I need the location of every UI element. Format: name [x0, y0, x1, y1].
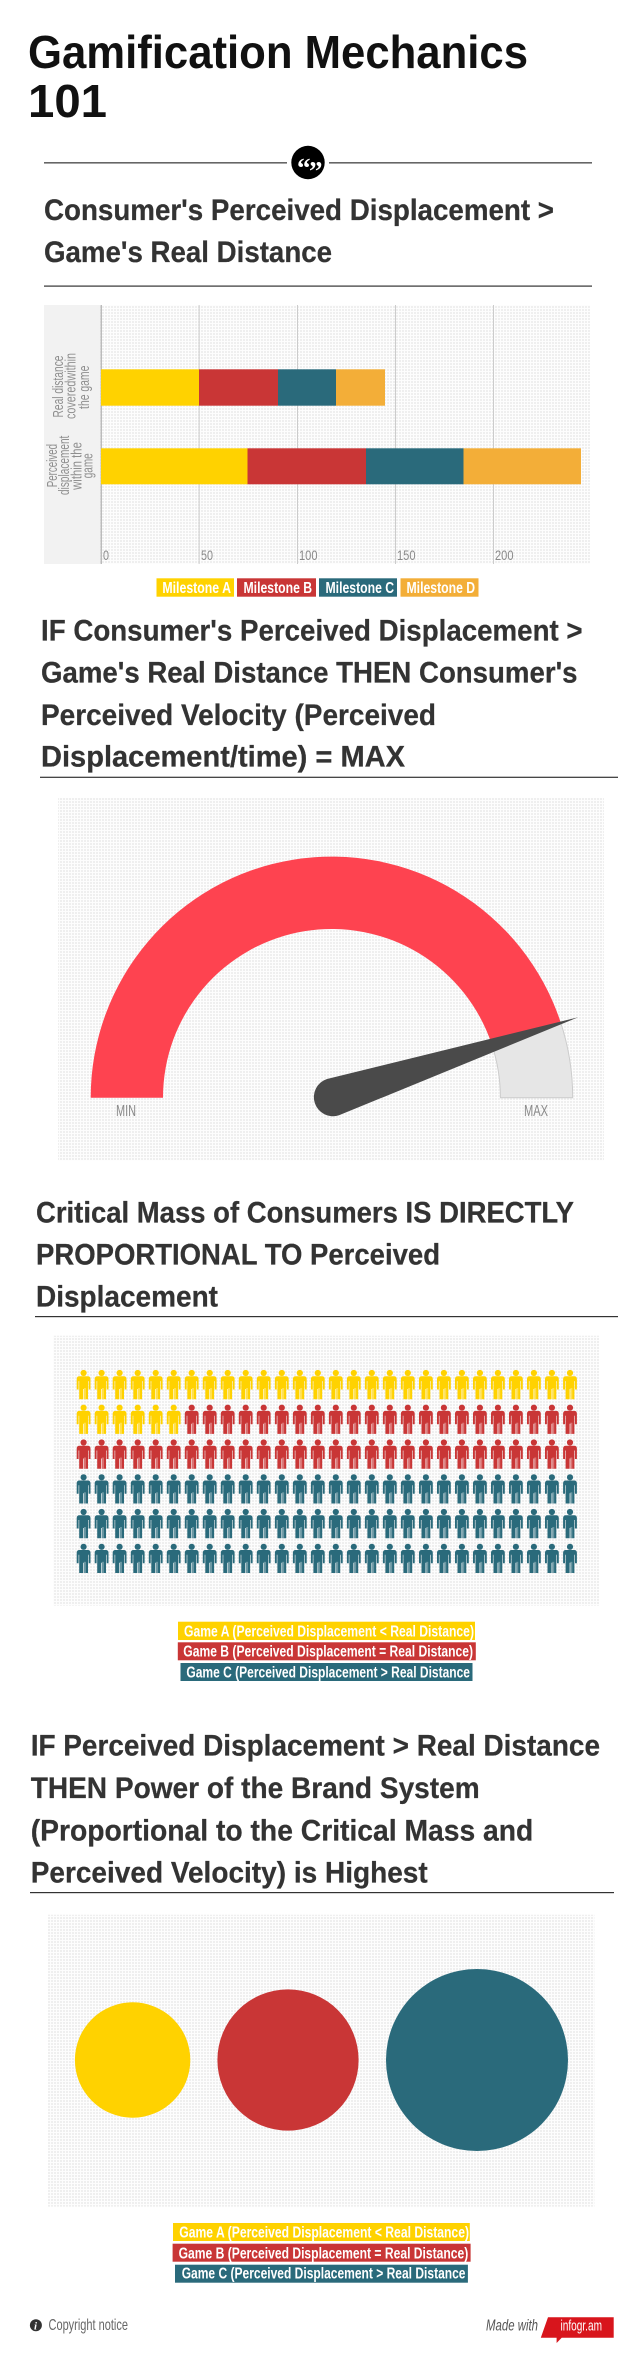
footer: copyright notice: i — [34, 2320, 38, 2332]
bubble: game A — [75, 2002, 190, 2118]
panel: stacked bar chart — [44, 305, 590, 564]
gauge value arc — [91, 857, 560, 1098]
heading: perceived velocity: IF Consumer's Perceived Displacement > — [41, 615, 583, 648]
title — [28, 26, 528, 127]
category label: perceived displacement: Perceived — [44, 444, 61, 487]
heading: perceived displacement — [44, 194, 554, 269]
heading: perceived displacement: Game's Real Distance — [44, 236, 332, 269]
axis labels: 0 — [103, 547, 109, 563]
gauge remainder — [492, 1022, 573, 1098]
axis labels: 50 — [201, 547, 213, 563]
bubble: game B — [217, 1989, 359, 2131]
row 3: game B — [77, 1439, 577, 1469]
legend: games (bubbles): Game B (Perceived Displacement = Real Distance) — [179, 2245, 468, 2262]
heading: perceived displacement: Consumer's Perceived Displacement > — [44, 194, 554, 227]
legend: games (bubbles): Game C (Perceived Displacement > Real Distance — [182, 2265, 466, 2282]
bubble: game C — [386, 1969, 568, 2151]
legend: games (pictogram): Game B (Perceived Displacement = Real Distance) — [183, 1644, 473, 1661]
row 2: game A and game B — [77, 1405, 577, 1434]
gauge min label: MIN — [116, 1103, 136, 1120]
category label: real distance: coveredwithin — [63, 353, 80, 419]
heading: critical mass — [36, 1196, 574, 1314]
legend: games (pictogram): Game C (Perceived Displacement > Real Distance — [186, 1665, 470, 1682]
heading: power of the brand: Perceived Velocity) is Highest — [31, 1856, 428, 1889]
category label: perceived displacement: within the — [69, 442, 86, 491]
category label: real distance — [50, 353, 93, 419]
heading: perceived velocity: Displacement/time) = MAX — [41, 741, 405, 774]
gauge needle — [314, 1017, 578, 1116]
footer: copyright notice: Copyright notice — [48, 2317, 128, 2334]
heading: perceived velocity: Perceived Velocity (Perceived — [41, 699, 436, 732]
legend: games (pictogram) — [178, 1622, 476, 1682]
panel: people pictogram — [53, 1336, 599, 1606]
category label: real distance: Real distance — [50, 356, 67, 418]
legend: games (bubbles) — [173, 2223, 471, 2283]
icon: quotation marks — [291, 146, 325, 186]
legend: milestones: Milestone B — [244, 580, 312, 597]
bar: perceived displacement — [101, 448, 581, 484]
category label: real distance: the game — [76, 366, 93, 409]
row 5: game C — [77, 1509, 577, 1538]
axis labels: 200 — [495, 547, 514, 563]
title: 101 — [28, 75, 107, 127]
category label: perceived displacement: game — [80, 453, 96, 478]
title: Gamification Mechanics — [28, 26, 528, 78]
legend: milestones: Milestone A — [162, 580, 231, 597]
gauge max label: MAX — [524, 1103, 548, 1120]
heading: critical mass: PROPORTIONAL TO Perceived — [36, 1238, 440, 1271]
heading: power of the brand: (Proportional to the Critical Mass and — [31, 1815, 533, 1848]
heading: critical mass: Critical Mass of Consumers IS DIRECTLY — [36, 1196, 574, 1229]
axis labels: 150 — [397, 547, 416, 563]
legend: milestones: Milestone C — [326, 580, 394, 597]
axis labels — [103, 547, 514, 563]
category label: perceived displacement: displacement — [56, 435, 73, 495]
heading: power of the brand: THEN Power of the Brand System — [31, 1772, 480, 1805]
legend: games (pictogram): Game A (Perceived Displacement < Real Distance) — [184, 1624, 474, 1641]
legend: games (bubbles): Game A (Perceived Displacement < Real Distance) — [179, 2224, 469, 2241]
row 6: game C — [77, 1544, 577, 1573]
legend: milestones: Milestone D — [406, 580, 475, 597]
panel: bubble chart — [48, 1915, 594, 2207]
footer: copyright notice — [30, 2317, 128, 2334]
row 4: game C — [77, 1474, 577, 1504]
axis labels: 100 — [299, 547, 318, 563]
heading: perceived velocity — [41, 615, 583, 774]
legend: milestones — [156, 578, 478, 597]
footer: made with infogr.am: Made with — [486, 2318, 538, 2335]
icon: quotation marks: ” — [309, 156, 322, 186]
bar: real distance — [101, 369, 385, 406]
heading: perceived velocity: Game's Real Distance THEN Consumer's — [41, 657, 578, 690]
footer: made with infogr.am — [486, 2317, 614, 2343]
icon: quotation marks: “ — [297, 153, 310, 183]
row 1: game A — [77, 1370, 577, 1399]
category label: perceived displacement — [44, 435, 96, 495]
heading: power of the brand — [31, 1730, 600, 1889]
heading: critical mass: Displacement — [36, 1281, 218, 1314]
panel: gauge — [58, 798, 604, 1161]
